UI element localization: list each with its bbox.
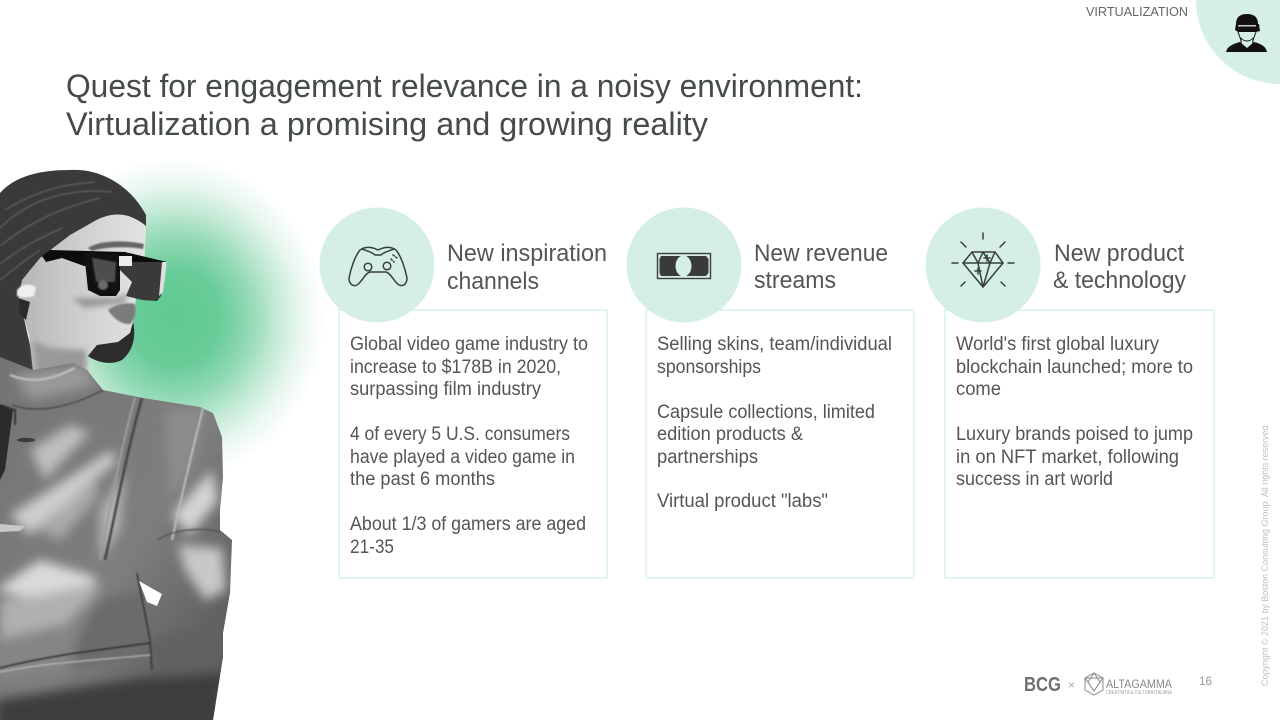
- icon: Altagamma polyhedron: [1085, 673, 1103, 695]
- top-right corner badge: [1196, 0, 1280, 84]
- icon circle: [626, 208, 742, 322]
- icon: person with VR headset: [1226, 14, 1267, 52]
- neck shadow: [33, 340, 86, 372]
- body text: sponsorships: [657, 357, 761, 378]
- multiplication sign: ×: [1068, 678, 1075, 692]
- panel: new revenue streams: [626, 208, 914, 578]
- footer logos: [1024, 673, 1173, 696]
- body text: edition products &: [657, 424, 803, 445]
- heading: channels: [447, 268, 539, 295]
- heading: [754, 240, 888, 294]
- body text: success in art world: [956, 469, 1113, 490]
- body text: come: [956, 379, 1001, 400]
- card box: [945, 310, 1214, 578]
- heading: [447, 240, 607, 295]
- title: [66, 68, 863, 142]
- cheek shadow below glasses: [72, 292, 128, 308]
- background glow: [25, 158, 325, 478]
- back hair behind neck: [86, 322, 134, 363]
- heading: streams: [754, 267, 836, 294]
- panel: new inspiration channels: [320, 208, 607, 578]
- body text: About 1/3 of gamers are aged: [350, 514, 586, 535]
- eyebrow: [88, 241, 144, 251]
- page number: 16: [1199, 674, 1212, 688]
- body text: have played a video game in: [350, 447, 575, 468]
- body text: [657, 334, 892, 512]
- copyright: Copyright © 2021 by Boston Consulting Group. All rights reserved.: [1260, 423, 1270, 686]
- heading: [1053, 240, 1186, 294]
- body text: 4 of every 5 U.S. consumers: [350, 424, 570, 445]
- heading: New inspiration: [447, 240, 607, 267]
- body text: surpassing film industry: [350, 379, 541, 400]
- icon: banknote: [658, 254, 710, 278]
- body text: Global video game industry to: [350, 334, 588, 355]
- body text: partnerships: [657, 447, 758, 468]
- heading: New product: [1054, 240, 1184, 267]
- body text: Capsule collections, limited: [657, 402, 875, 423]
- face and neck: [18, 215, 146, 372]
- BCG logo: BCG: [1024, 674, 1061, 696]
- hair: [0, 170, 146, 372]
- body text: [956, 334, 1193, 490]
- sunglasses: [42, 250, 167, 301]
- title: Quest for engagement relevance in a noisy environment:: [66, 68, 863, 104]
- icon: game controller: [349, 247, 407, 286]
- card box: [646, 310, 914, 578]
- body text: Virtual product "labs": [657, 491, 828, 512]
- Altagamma tagline: CREATIVITÀ E CULTURA ITALIANA: [1106, 689, 1173, 696]
- body text: 21-35: [350, 537, 394, 558]
- body text: World's first global luxury: [956, 334, 1159, 355]
- panel: new product and technology: [926, 208, 1214, 578]
- body text: Luxury brands poised to jump: [956, 424, 1193, 445]
- title: Virtualization a promising and growing reality: [66, 106, 708, 142]
- body text: the past 6 months: [350, 469, 495, 490]
- body text: Selling skins, team/individual: [657, 334, 892, 355]
- Altagamma wordmark: ALTAGAMMA: [1106, 677, 1172, 691]
- photo: woman with glasses and leather jacket: [0, 170, 232, 720]
- heading: New revenue: [754, 240, 888, 267]
- jacket seams: [0, 368, 220, 672]
- jacket: [0, 357, 232, 720]
- card box: [339, 310, 607, 578]
- icon: diamond: [952, 233, 1014, 287]
- body text: increase to $178B in 2020,: [350, 357, 561, 378]
- icon circle: [320, 208, 434, 322]
- section label: VIRTUALIZATION: [1086, 4, 1188, 19]
- lips: [108, 303, 135, 324]
- jacket highlights: [0, 365, 226, 720]
- heading: & technology: [1053, 267, 1186, 294]
- icon circle: [926, 208, 1040, 322]
- ear: [17, 284, 36, 298]
- body text: blockchain launched; more to: [956, 357, 1193, 378]
- body text: in on NFT market, following: [956, 447, 1179, 468]
- body text: [350, 334, 588, 558]
- gap between arm and body: [139, 581, 162, 606]
